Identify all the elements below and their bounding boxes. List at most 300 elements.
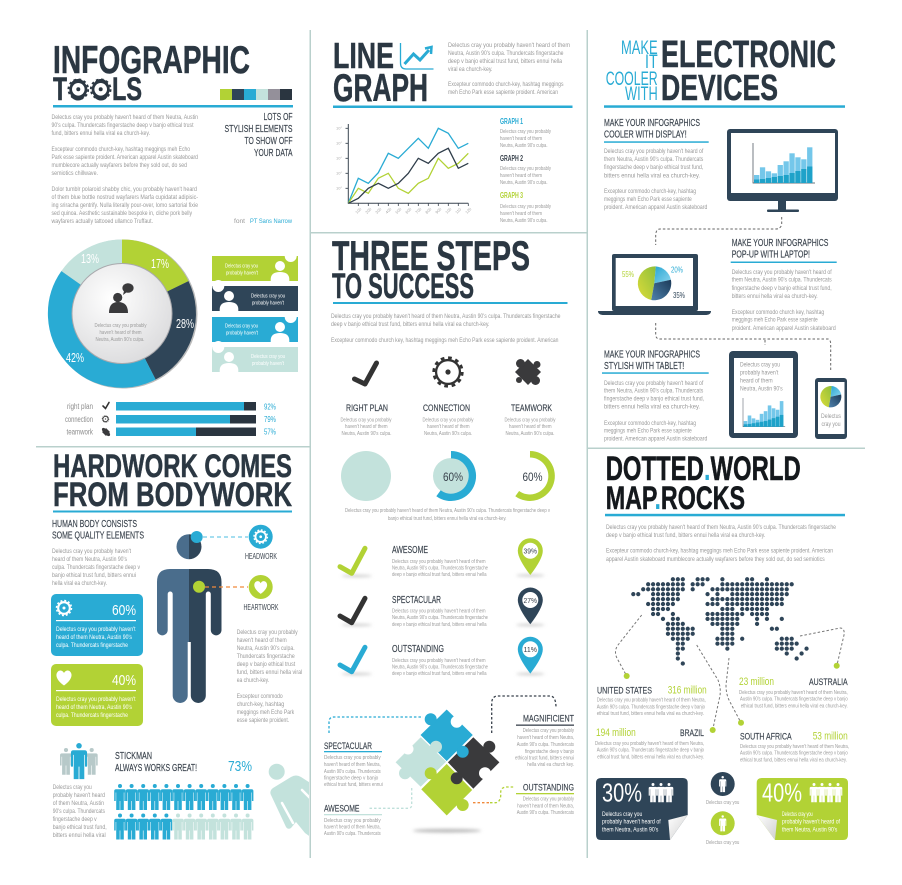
donut chart: 42%	[66, 350, 84, 365]
title: infographic tools: O	[69, 74, 87, 107]
progress bars: right plan	[67, 402, 93, 411]
figure circle: navy	[706, 772, 739, 806]
stat: south africa: 53 million	[813, 730, 848, 742]
stickman text: fingerstache deep v	[53, 816, 97, 823]
card: 40%: probably haven't heard of	[782, 819, 840, 826]
section: display: Delectus cray you probably haven't heard of	[604, 148, 703, 155]
stat: united states: 316 million	[668, 684, 707, 696]
legend: graph 1: GRAPH 1	[500, 117, 523, 126]
card: 40%: Delectus cray you	[782, 811, 813, 818]
section: tablet: MAKE YOUR INFOGRAPHICS	[604, 349, 700, 360]
intro text: deep v banjo ethical trust fund, bitters ennui hella viral ea church-key.	[331, 321, 490, 328]
section: display: proident. American apparel Austin skateboard	[604, 204, 708, 211]
section: display: fingerstache deep v banjo ethical trust fund,	[604, 164, 703, 171]
row: awesome: AWESOME	[392, 545, 428, 556]
title: hardwork: FROM BODYWORK	[53, 476, 292, 514]
green stat card: culpa. Thundercats fingerstache	[56, 712, 128, 719]
row: spectacular: Neutra, Austin 90's culpa. Thundercats fingerstache	[392, 615, 488, 621]
panel: dotted world map	[595, 450, 849, 846]
title: electronic devices: DEVICES	[661, 67, 778, 108]
section: laptop: them Neutra, Austin 90's culpa. Thundercats	[732, 277, 832, 284]
callout: magnificient: hella viral ea church key.	[527, 762, 574, 768]
row: spectacular	[340, 588, 544, 628]
callout: awesome: haven't heard of them Neutra,	[324, 824, 381, 830]
stat: united states	[597, 684, 707, 717]
icon: phone: cray you	[822, 421, 841, 428]
caption: Delectus cray you probably haven't heard of them Neutra, Austin 90's culpa. Thundercats fingerstache deep v	[345, 508, 550, 514]
intro text: meh Echo Park esse sapiente proident. American	[448, 89, 558, 96]
line chart: 900	[434, 206, 443, 215]
title: electronic devices: ELECTRONIC	[661, 34, 836, 76]
icon: tablet: probably haven't	[740, 370, 778, 377]
row: outstanding: 11%	[524, 645, 537, 654]
callout: headwork	[203, 525, 277, 561]
line chart: 200	[364, 206, 373, 215]
person cards: Delectus cray you	[251, 294, 285, 300]
section: laptop: meggings meh Echo Park esse sapiente	[732, 317, 818, 324]
section: tablet: bitters ennui hella viral ea church-key.	[604, 403, 700, 410]
intro text	[51, 114, 198, 225]
tagline: TO SHOW OFF	[244, 136, 292, 147]
callout: magnificient: haven't heard of them Neutra,	[517, 735, 574, 741]
stat: australia: ethical trust fund, bitters ennui hella viral ea church-key.	[741, 703, 848, 709]
step: right plan: Neutra, Austin 90's culpa.	[342, 431, 392, 437]
legend: graph 1: haven't heard of them	[500, 136, 542, 142]
stat: australia: 23 million	[739, 676, 774, 688]
person cards: probably haven't	[252, 361, 284, 367]
callout: magnificient: fingerstache deep v banjo	[525, 749, 574, 755]
icon: tablet: Neutra, Austin 90's	[740, 386, 783, 393]
stat: brazil: Austin 90's culpa. Thundercats fingerstache deep v banjo	[597, 748, 704, 754]
line chart	[336, 124, 473, 215]
intro text: Excepteur commodo church key, hashtag meggings meh Echo Park esse sapiente proident. American	[331, 337, 559, 344]
section: tablet	[602, 349, 709, 443]
section: tablet: proident. American apparel Austin skateboard	[604, 436, 708, 443]
tagline	[224, 112, 293, 159]
step: right plan	[340, 363, 392, 437]
line chart: 10°	[336, 140, 342, 146]
section: laptop: bitters ennui hella viral ea church-key.	[732, 293, 818, 300]
step: teamwork: haven't heard of them	[509, 424, 552, 430]
body text right: Neutra, Austin 90's culpa.	[237, 645, 295, 652]
section: display: them Neutra, Austin 90's culpa. Thundercats	[604, 156, 704, 163]
legend: graph 2	[500, 154, 551, 186]
title: line graph: GRAPH	[333, 67, 428, 110]
person cards: probably haven't	[226, 330, 258, 336]
stat: brazil: BRAZIL	[680, 728, 704, 739]
blue stat card: heard of them Neutra, Austin 90's	[56, 634, 132, 641]
legend: graph 2: GRAPH 2	[500, 154, 523, 163]
section: laptop: Excepteur commodo church key, hashtag	[732, 309, 824, 316]
intro text: Excepteur commodo church-key, hashtag meggings meh Echo	[52, 146, 190, 153]
line chart: 800	[424, 206, 433, 215]
intro text	[606, 524, 836, 563]
icon: laptop with pie: 55%	[622, 270, 634, 279]
step: right plan: Delectus cray you probably	[340, 418, 392, 424]
row: outstanding	[340, 637, 544, 677]
step: teamwork: Delectus cray you probably	[504, 418, 556, 424]
stat: australia: Austin 90's culpa. Thundercats fingerstache deep v banjo	[740, 697, 848, 703]
callout: spectacular: Delectus cray you probably	[324, 755, 381, 761]
blue ring 60%: 60%	[443, 470, 463, 484]
row: outstanding: Neutra, Austin 90's culpa. Thundercats fingerstache	[392, 664, 488, 670]
body text left	[52, 548, 141, 587]
title: electronic devices: COOLER	[606, 69, 658, 90]
step: connection: haven't heard of them	[427, 424, 470, 430]
tagline: LOTS OF	[264, 112, 292, 123]
card: 30%	[596, 778, 688, 840]
callout: spectacular: fingerstache deep v banjo	[324, 776, 378, 782]
icon: tablet: heard of them	[740, 378, 773, 385]
donut chart: 17%	[151, 256, 169, 271]
intro text: Delectus cray you probably haven't heard of them Neutra, Austin	[52, 114, 198, 121]
legend: graph 1	[500, 117, 551, 149]
person cards	[212, 250, 298, 372]
section: laptop: Delectus cray you probably haven't heard of	[732, 269, 832, 276]
row: spectacular: 27%	[524, 596, 537, 605]
callout: magnificient: MAGNIFICIENT	[523, 714, 574, 725]
stat: south africa: Austin 90's culpa. Thundercats fingerstache deep v banjo	[740, 751, 848, 757]
legend: graph 2: haven't heard of them	[500, 173, 542, 179]
card: 30%: 30%	[602, 778, 642, 808]
row: outstanding: deep v banjo ethical trust fund, bitters ennui hella	[392, 671, 487, 677]
stickman text: 90's culpa. Thundercats	[53, 808, 106, 815]
blue ring 60%	[433, 455, 472, 497]
donut chart: Neutra, Austin 90's culpa.	[96, 337, 145, 343]
legend: graph 3: Neutra, Austin 90's culpa.	[500, 218, 548, 224]
subheading	[52, 519, 144, 542]
stickman heading	[115, 751, 197, 774]
person cards: probably haven't	[252, 300, 284, 306]
subheading: HUMAN BODY CONSISTS	[52, 519, 137, 530]
intro text	[331, 313, 561, 344]
intro text: mumblecore actually wayfarers before they sold out, do sed	[52, 162, 187, 169]
line chart: 10°	[336, 126, 342, 130]
stat: united states: ethical trust fund, bitters ennui hella viral ea church-key.	[597, 711, 704, 717]
body text right: Thundercats fingerstache	[237, 653, 295, 660]
step: connection: Delectus cray you probably	[422, 418, 474, 424]
icon: tablet: Delectus cray you	[740, 362, 780, 369]
row: spectacular: SPECTACULAR	[392, 595, 441, 606]
progress bars: 92%	[264, 402, 276, 412]
stat: united states: Austin 90's culpa. Thundercats fingerstache deep v banjo	[597, 704, 705, 710]
callout: awesome: AWESOME	[324, 804, 360, 815]
green stat card: heard of them Neutra, Austin 90's	[56, 704, 132, 711]
intro text: wayfarers actually tattooed ullamco Truffaut.	[51, 218, 153, 225]
intro text: Park esse sapiente proident. American apparel Austin skateboard	[52, 154, 198, 161]
body text right: ea church-key.	[237, 677, 269, 684]
panel: line graph	[333, 35, 572, 224]
stickman text: bitters ennui hella viral	[53, 832, 106, 839]
stat: brazil: ethical trust fund, bitters ennui hella viral ea church-key.	[597, 754, 704, 760]
legend: graph 3: Delectus cray you probably	[500, 204, 551, 210]
stat: south africa: Delectus cray you probably haven't heard of them Neutra,	[740, 744, 849, 750]
step: teamwork	[504, 359, 556, 437]
body text right: meggings meh Echo Park	[237, 709, 295, 716]
section: tablet: Excepteur commodo church-key, hashtag	[604, 420, 696, 427]
title: infographic tools: INFOGRAPHIC	[53, 39, 250, 82]
panel: electronic devices	[598, 34, 847, 443]
dashed connectors	[656, 217, 831, 372]
stat 73%: 73%	[228, 758, 252, 775]
stat: south africa: ethical trust fund, bitters ennui hella viral ea church-key.	[740, 757, 847, 763]
mint circle	[341, 451, 391, 501]
donut chart	[48, 240, 198, 388]
body text right: church-key, hashtag	[237, 701, 284, 708]
intro text: apparel Austin skateboard mumblecore actually wayfarers before they sold out, do sed semiotics	[606, 556, 825, 563]
section: laptop: proident. American apparel Austin skateboard	[732, 325, 836, 332]
font note: font	[234, 218, 245, 225]
tagline: STYLISH ELEMENTS	[224, 124, 293, 135]
font note	[234, 218, 292, 225]
card: 40%	[757, 778, 848, 840]
stat: south africa: SOUTH AFRICA	[740, 731, 792, 742]
step: right plan: haven't heard of them	[345, 424, 388, 430]
legend: graph 1: Delectus cray you probably	[500, 129, 551, 135]
stat: south africa	[740, 730, 849, 763]
line chart: 700	[414, 206, 423, 215]
blue stat card: culpa. Thundercats fingerstache	[56, 642, 128, 649]
line chart: 10°	[336, 170, 342, 176]
callout: magnificient: Austin 90's culpa. Thundercats	[517, 742, 574, 748]
line chart: 100	[444, 206, 453, 215]
callout: spectacular: SPECTACULAR	[324, 741, 372, 752]
row: outstanding: Delectus cray you probably haven't heard of them	[392, 658, 486, 664]
stat: united states: UNITED STATES	[597, 685, 652, 696]
legend: graph 3: GRAPH 3	[500, 191, 523, 200]
icon: people talking	[109, 283, 134, 313]
callout: outstanding	[516, 783, 574, 816]
intro text: 90's culpa. Thundercats fingerstache deep v banjo ethical trust	[52, 122, 194, 129]
line chart: 400	[384, 206, 393, 215]
title: hardwork: HARDWORK COMES	[53, 448, 292, 484]
card: 30%: Delectus cray you	[602, 811, 643, 818]
line chart: 10°	[336, 186, 342, 190]
body text right: esse sapiente proident.	[237, 717, 289, 724]
row: awesome: Neutra, Austin 90's culpa. Thundercats fingerstache	[392, 566, 488, 572]
subheading: SOME QUALITY ELEMENTS	[52, 530, 144, 542]
callout: spectacular	[324, 741, 383, 788]
intro text: deep v banjo ethical trust fund, bitters ennui hella	[448, 58, 562, 65]
section: display: MAKE YOUR INFOGRAPHICS	[604, 118, 700, 129]
blue stat card: 60%	[112, 602, 136, 619]
intro text: Delectus cray you probably haven't heard of them Neutra, Austin 90's culpa. Thundercats fingerstache	[606, 524, 836, 531]
intro text: deep v banjo ethical trust fund, bitters ennui hella viral ea church-key.	[606, 532, 765, 539]
colour swatches	[220, 89, 292, 100]
row: spectacular: Delectus cray you probably haven't heard of them	[392, 608, 486, 614]
body text left: hella viral ea church-key.	[52, 580, 107, 587]
legend: graph 3	[500, 191, 551, 224]
donut chart: 28%	[176, 316, 194, 331]
title: hardwork	[53, 448, 292, 514]
stat: australia	[739, 676, 848, 709]
intro text: Excepteur commodo church-key, hashtag meggings meh Echo Park esse sapiente proident. American	[606, 548, 833, 555]
panel: hardwork comes from bodywork	[51, 448, 312, 840]
row: spectacular: deep v banjo ethical trust fund, bitters ennui hella	[392, 622, 487, 628]
body text left: culpa. Thundercats fingerstache deep v	[52, 564, 141, 571]
title: electronic devices: IT	[645, 52, 658, 73]
intro text: Excepteur commodo church-key, hashtag meggings	[448, 81, 564, 88]
stickman text: of them Neutra, Austin	[53, 800, 104, 807]
tagline: YOUR DATA	[254, 148, 293, 159]
callout: awesome: Austin 90's culpa. Thundercats	[324, 831, 381, 837]
intro text: ing sriracha gentrify. Nulla literally pour-over, lomo sartorial fixie	[52, 202, 198, 209]
row: awesome: Delectus cray you probably haven't heard of them	[392, 559, 486, 565]
title: infographic tools: LS	[112, 71, 142, 107]
title: dotted world map rocks	[606, 450, 801, 516]
stickman heading: STICKMAN	[115, 751, 152, 762]
callout: spectacular: Austin 90's culpa. Thundercats	[324, 769, 381, 775]
icon: laptop with pie: 20%	[671, 265, 683, 274]
step: teamwork: TEAMWORK	[511, 403, 552, 414]
callout: outstanding: haven't heard of them Neutra,	[517, 803, 574, 809]
green stat card	[51, 664, 143, 726]
body text right	[237, 629, 303, 724]
line chart: 110	[454, 206, 463, 215]
stickman text	[53, 784, 107, 839]
step: connection: CONNECTION	[423, 403, 470, 414]
section: tablet: them Neutra, Austin 90's culpa. Thundercats	[604, 388, 704, 395]
intro text: of them blue bottle nostrud wayfarers Marfa cupidatat adipisic-	[52, 194, 198, 201]
card: 30%: probably haven't heard of	[602, 819, 661, 826]
stat: united states: Delectus cray you probably haven't heard of them Neutra,	[597, 698, 706, 704]
title: electronic devices	[606, 34, 836, 108]
title: three steps: TO SUCCESS	[332, 267, 474, 306]
donut chart: 13%	[81, 251, 99, 266]
map pins	[624, 663, 840, 733]
legend: graph 2: Delectus cray you probably	[500, 166, 551, 172]
icon: phone: Delectus	[821, 413, 842, 420]
intro text: Neutra, Austin 90's culpa. Thundercats fingerstache	[448, 50, 564, 57]
progress bars: connection	[65, 415, 93, 424]
donut chart: haven't heard of them	[100, 330, 142, 336]
row: awesome	[340, 538, 544, 578]
line chart: 500	[394, 206, 403, 215]
progress bars	[65, 402, 276, 436]
body text left: banjo ethical trust fund, bitters ennui	[52, 572, 136, 579]
body text right: Delectus cray you probably	[237, 629, 298, 636]
callout: outstanding: Delectus cray you probably	[523, 797, 574, 803]
section: laptop: fingerstache deep v banjo ethical trust fund,	[732, 285, 832, 292]
intro text: sed quinoa. Aesthetic sustainable bespoke in, cliche pork belly	[52, 210, 193, 217]
stat: australia: Delectus cray you probably haven't heard of them Neutra,	[739, 690, 848, 696]
intro text: Delectus cray you probably haven't heard of them Neutra, Austin 90's culpa. Thundercats fingerstache	[331, 313, 561, 320]
row: awesome: deep v banjo ethical trust fund, bitters ennui hella	[392, 572, 487, 578]
green stat card: 40%	[112, 672, 136, 689]
body text right: deep v banjo ethical trust	[237, 661, 295, 668]
intro text: semiotics chillwave.	[52, 170, 98, 177]
icon: laptop with pie	[598, 254, 711, 315]
intro text: Delectus cray you probably haven't heard of them	[448, 42, 570, 49]
card: 40%: 40%	[762, 778, 802, 808]
green ring 60%	[517, 454, 552, 498]
blue stat card: Delectus cray you probably haven't	[56, 626, 136, 633]
callout: magnificient: Delectus cray you probably	[523, 728, 574, 734]
line chart: 10°	[336, 156, 342, 160]
green stat card: Delectus cray you probably haven't	[56, 696, 136, 703]
big tilted stickman	[269, 764, 312, 838]
callout: awesome	[324, 804, 382, 837]
stickman text: banjo ethical trust fund,	[53, 824, 107, 831]
line chart: 600	[404, 206, 413, 215]
section: tablet: meggings meh Echo Park esse sapiente	[604, 428, 692, 435]
person cards: Delectus cray you	[225, 264, 258, 270]
section: laptop: POP-UP WITH LAPTOP!	[732, 250, 810, 261]
stickman pictogram grid	[114, 784, 253, 840]
icon: tablet	[729, 351, 798, 438]
blue stat card	[51, 594, 143, 656]
stat: brazil: Delectus cray you probably haven't heard of them Neutra,	[595, 741, 704, 747]
figure circle: green	[706, 811, 739, 846]
step: right plan: RIGHT PLAN	[346, 403, 388, 414]
person cards: probably haven't	[226, 270, 258, 276]
intro text: viral ea church-key.	[448, 66, 493, 73]
stickman text: Delectus cray you	[53, 784, 92, 791]
body text right: haven't heard of them	[237, 637, 287, 644]
card: 40%: them Neutra, Austin 90's	[782, 827, 837, 834]
font note: PT Sans Narrow	[250, 218, 292, 225]
row: outstanding: OUTSTANDING	[392, 644, 444, 655]
stickman text: probably haven't heard	[53, 792, 105, 799]
section: display	[604, 118, 709, 211]
intro text: Dolor tumblr polaroid shabby chic, you probably haven't heard	[52, 186, 197, 193]
progress bars: 57%	[264, 428, 276, 436]
step: connection	[422, 358, 474, 437]
icon: phone	[815, 378, 847, 439]
figure circle: green: Delectus cray you	[706, 840, 739, 846]
row: awesome: 39%	[524, 546, 537, 556]
puzzle	[395, 709, 500, 833]
title: dotted world map rocks: MAP.ROCKS	[606, 480, 745, 516]
title: dotted world map rocks: DOTTED.WORLD	[606, 450, 801, 488]
intro text: fund, bitters ennui hella viral ea church-key.	[52, 130, 150, 137]
legend: graph 1: Neutra, Austin 90's culpa.	[500, 143, 548, 149]
body text right: fund, bitters ennui hella viral	[237, 669, 303, 676]
section: tablet: Delectus cray you probably haven't heard of	[604, 380, 703, 387]
stat: brazil	[595, 727, 704, 760]
legend: graph 3: haven't heard of them	[500, 211, 542, 217]
callout: outstanding: OUTSTANDING	[523, 783, 574, 794]
step: teamwork: Neutra, Austin 90's culpa.	[506, 431, 555, 437]
section: laptop	[731, 238, 837, 332]
section: laptop: MAKE YOUR INFOGRAPHICS	[732, 238, 829, 249]
callout: spectacular: ethical trust fund, bitters ennui	[324, 782, 383, 788]
title: line graph	[333, 35, 428, 110]
icon: rising chart	[400, 43, 434, 69]
line chart: 300	[374, 206, 383, 215]
card: 30%: them Neutra, Austin 90's	[602, 827, 658, 834]
person cards: Delectus cray you	[251, 354, 285, 360]
icon: laptop with pie: 35%	[673, 291, 685, 300]
icon: monitor with bar chart	[727, 129, 838, 212]
icon: stickman group	[60, 743, 98, 779]
callout: outstanding: Austin 90's culpa. Thundercats	[517, 810, 574, 816]
body text left: Delectus cray you probably haven't	[52, 548, 131, 555]
callout: spectacular: haven't heard of them Neutra,	[324, 762, 381, 768]
title: infographic tools: T	[53, 71, 67, 107]
line chart: 100	[354, 206, 363, 215]
legend: graph 2: Neutra, Austin 90's culpa.	[500, 180, 548, 186]
stat: australia: AUSTRALIA	[809, 677, 848, 688]
section: display: bitters ennui hella viral ea church-key.	[604, 172, 700, 180]
body text right: Excepteur commodo	[237, 693, 283, 700]
title: three steps	[332, 232, 530, 306]
intro text	[448, 42, 570, 96]
callout: heartwork	[205, 575, 279, 612]
progress bars: teamwork	[66, 428, 94, 436]
caption: banjo ethical trust fund, bitters ennui hella viral ea church-key.	[388, 516, 507, 522]
step: connection: Neutra, Austin 90's culpa.	[424, 431, 472, 437]
